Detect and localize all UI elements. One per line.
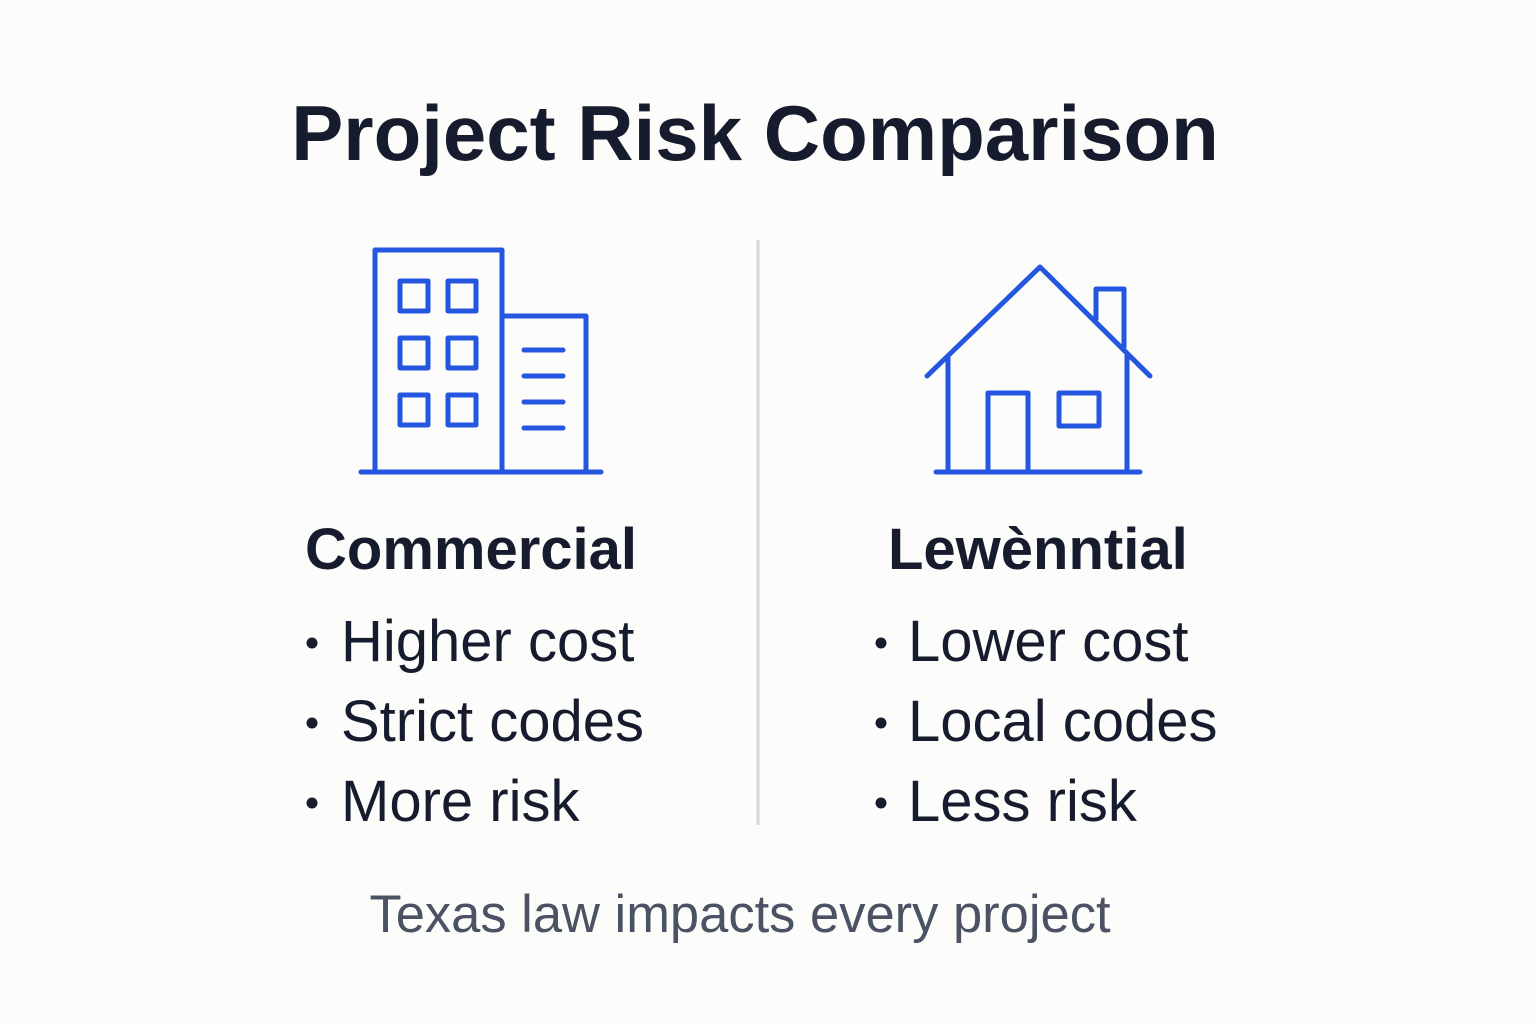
heading: Residential: Lewènntial <box>888 517 1188 582</box>
title: Project Risk Comparison <box>291 89 1219 177</box>
panel: residential <box>876 267 1218 834</box>
list: residential bullets <box>876 609 1218 834</box>
list: residential bullets: Less risk <box>908 769 1138 834</box>
list: residential bullets: Local codes <box>908 689 1218 754</box>
icon: office building <box>361 250 601 472</box>
heading: Commercial: Commercial <box>305 517 637 582</box>
list: residential bullets: Lower cost <box>908 609 1188 674</box>
list: commercial bullets: More risk <box>341 769 580 834</box>
list: commercial bullets <box>306 609 644 834</box>
list: commercial bullets: Higher cost <box>341 609 634 674</box>
list: commercial bullets: Strict codes <box>341 689 644 754</box>
icon: house <box>927 267 1150 472</box>
footer caption: Texas law impacts every project <box>369 885 1111 944</box>
divider <box>756 240 760 825</box>
panel: commercial <box>305 250 644 834</box>
